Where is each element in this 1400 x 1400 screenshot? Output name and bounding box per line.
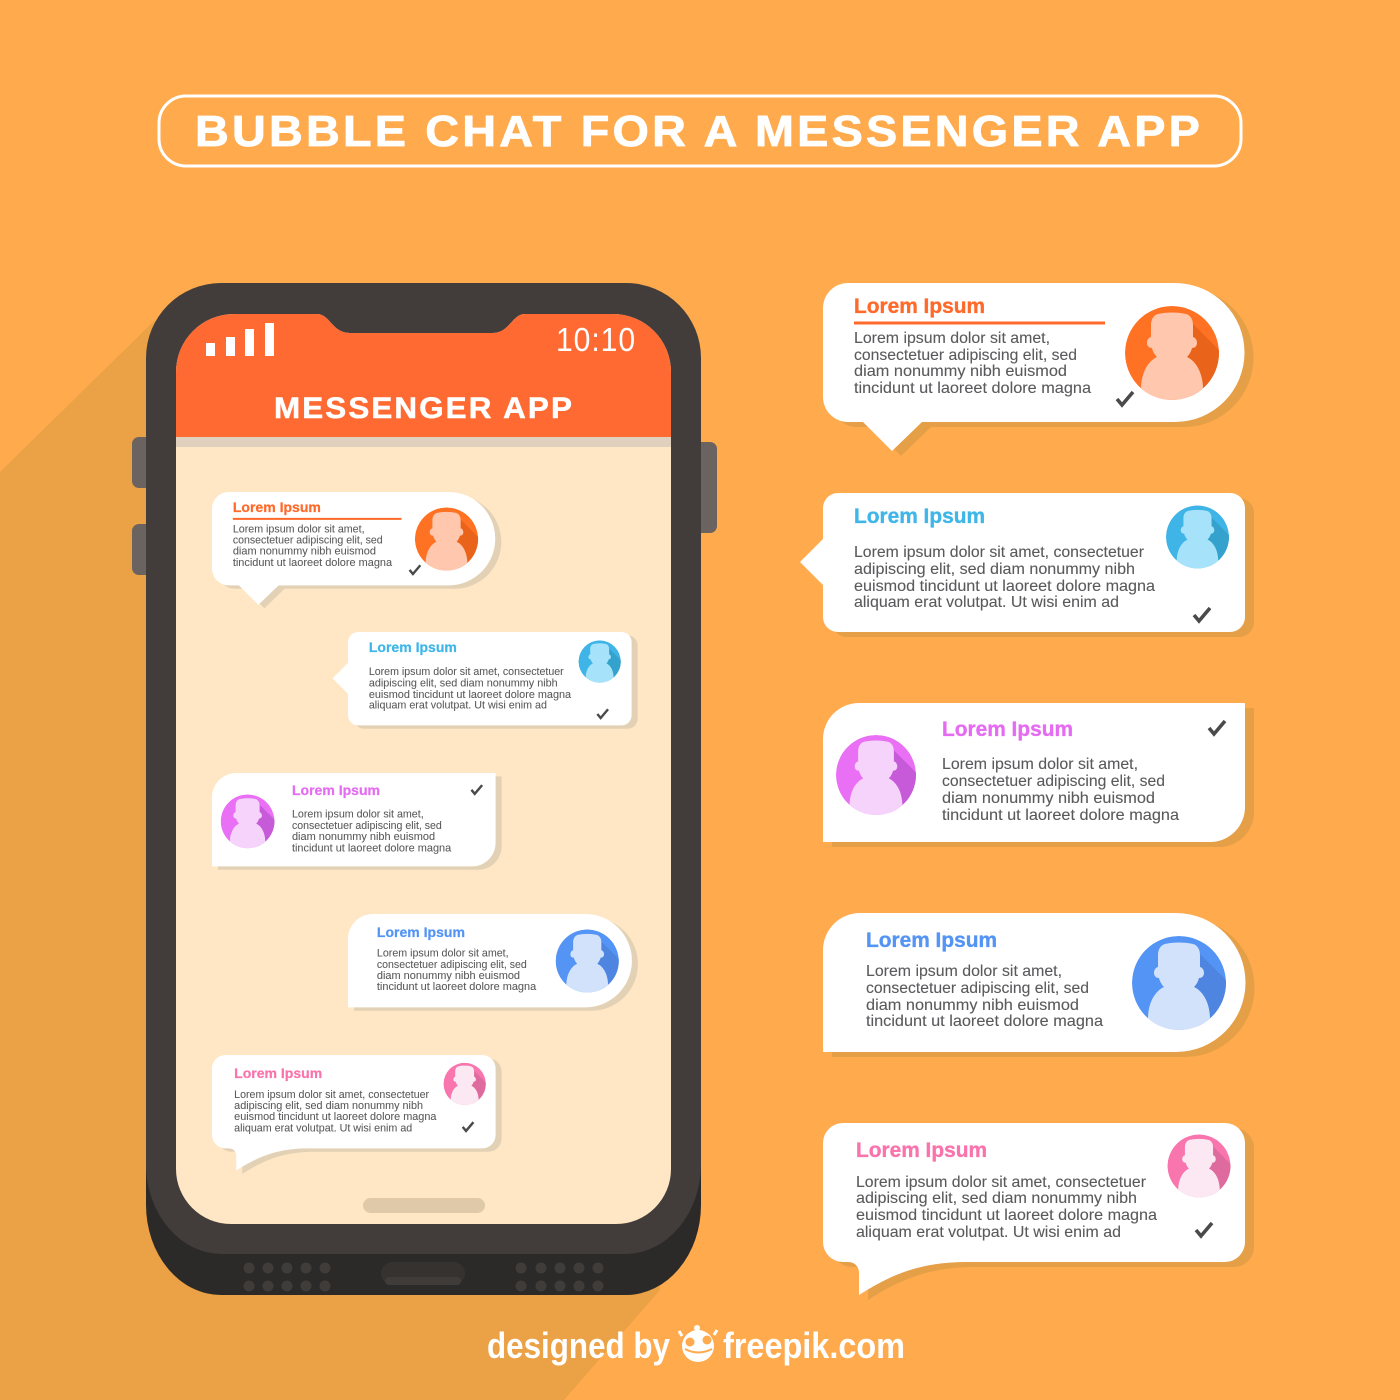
- phone bubble: blue: [348, 914, 638, 1011]
- large bubble: pink: aliquam erat volutpat. Ut wisi enim ad: [856, 1224, 1121, 1241]
- phone bubble: purple: diam nonummy nibh euismod: [292, 831, 435, 843]
- screen: [176, 314, 671, 1224]
- freepik attribution: freepik.com: [723, 1325, 905, 1366]
- large bubble: purple: Lorem Ipsum: [942, 718, 1073, 741]
- large bubble: cyan: Lorem Ipsum: [854, 505, 985, 528]
- large bubble: blue: Lorem ipsum dolor sit amet,: [866, 963, 1062, 980]
- phone bubble: pink: euismod tincidunt ut laoreet dolore magna: [234, 1111, 436, 1123]
- phone front: [146, 283, 701, 1254]
- large bubble: orange: Lorem Ipsum: [854, 295, 985, 318]
- large bubble: pink: Lorem ipsum dolor sit amet, consectetuer: [856, 1174, 1147, 1191]
- large bubble: pink: [823, 1123, 1254, 1300]
- large bubble: purple: diam nonummy nibh euismod: [942, 790, 1155, 807]
- home bar: [363, 1198, 485, 1213]
- large bubble: orange: Lorem ipsum dolor sit amet,: [854, 330, 1050, 347]
- large bubble: purple: tincidunt ut laoreet dolore magna: [942, 807, 1179, 824]
- title: BUBBLE CHAT FOR A MESSENGER APP: [195, 107, 1203, 156]
- phone bubble: pink: adipiscing elit, sed diam nonummy nibh: [234, 1100, 423, 1112]
- clock: 10:10: [556, 321, 636, 358]
- freepik attribution: designed by: [487, 1325, 670, 1366]
- large bubble: blue: consectetuer adipiscing elit, sed: [866, 980, 1089, 997]
- phone bubble: orange: tincidunt ut laoreet dolore magna: [233, 557, 392, 569]
- large bubble: cyan: aliquam erat volutpat. Ut wisi enim ad: [854, 594, 1119, 611]
- large bubble: orange: consectetuer adipiscing elit, sed: [854, 347, 1077, 364]
- phone bubble: blue: Lorem ipsum dolor sit amet,: [377, 947, 509, 959]
- large bubble: blue: Lorem Ipsum: [866, 929, 997, 952]
- signal bars: [206, 323, 274, 356]
- phone base: [146, 800, 701, 1295]
- large bubble: blue: tincidunt ut laoreet dolore magna: [866, 1013, 1103, 1030]
- large bubble: cyan: [800, 493, 1254, 637]
- large bubble: cyan: adipiscing elit, sed diam nonummy nibh: [854, 561, 1135, 578]
- phone bubble: purple: Lorem Ipsum: [292, 782, 380, 798]
- phone bubble: pink: [212, 1055, 502, 1174]
- large bubble: purple: Lorem ipsum dolor sit amet,: [942, 756, 1138, 773]
- speakers and port: [244, 1262, 604, 1292]
- phone bubble: cyan: Lorem Ipsum: [369, 639, 457, 655]
- phone bubble: purple: tincidunt ut laoreet dolore magna: [292, 843, 451, 855]
- app header: [176, 314, 671, 437]
- app title: MESSENGER APP: [274, 392, 574, 425]
- large bubble: pink: adipiscing elit, sed diam nonummy nibh: [856, 1190, 1137, 1207]
- phone bubble: purple: consectetuer adipiscing elit, sed: [292, 820, 442, 832]
- phone: [132, 283, 717, 1295]
- phone bubble: blue: diam nonummy nibh euismod: [377, 970, 520, 982]
- phone bubble: cyan: aliquam erat volutpat. Ut wisi enim ad: [369, 700, 547, 712]
- phone bubble: pink: aliquam erat volutpat. Ut wisi enim ad: [234, 1123, 412, 1135]
- phone bubble: orange: diam nonummy nibh euismod: [233, 545, 376, 557]
- phone bubble: pink: Lorem Ipsum: [234, 1065, 322, 1081]
- side buttons: [132, 437, 717, 575]
- large bubble: orange: diam nonummy nibh euismod: [854, 363, 1067, 380]
- phone bubble: purple: Lorem ipsum dolor sit amet,: [292, 808, 424, 820]
- long phone shadow: [0, 320, 660, 1400]
- large bubble: blue: [823, 913, 1254, 1057]
- phone bubble: cyan: Lorem ipsum dolor sit amet, consectetuer: [369, 666, 564, 678]
- phone bubble: blue: tincidunt ut laoreet dolore magna: [377, 981, 536, 993]
- large bubble: orange: tincidunt ut laoreet dolore magna: [854, 380, 1091, 397]
- phone bubble: orange: Lorem Ipsum: [233, 499, 321, 515]
- large bubble: pink: Lorem Ipsum: [856, 1139, 987, 1162]
- large bubble: blue: diam nonummy nibh euismod: [866, 997, 1079, 1014]
- phone bubble: blue: consectetuer adipiscing elit, sed: [377, 959, 527, 971]
- phone bubble: orange: [212, 492, 501, 608]
- large bubble: purple: consectetuer adipiscing elit, sed: [942, 773, 1165, 790]
- freepik attribution: [487, 1325, 905, 1366]
- phone bubble: cyan: euismod tincidunt ut laoreet dolore magna: [369, 689, 571, 701]
- large bubble: purple: [823, 703, 1254, 847]
- title: [159, 96, 1241, 166]
- phone bubble: pink: Lorem ipsum dolor sit amet, consectetuer: [234, 1089, 429, 1101]
- large bubble: pink: euismod tincidunt ut laoreet dolore magna: [856, 1207, 1157, 1224]
- phone bubble: cyan: adipiscing elit, sed diam nonummy nibh: [369, 677, 558, 689]
- icon: freepik logo: [679, 1325, 717, 1362]
- phone bubble: orange: Lorem ipsum dolor sit amet,: [233, 523, 365, 535]
- phone bubble: purple: [212, 773, 502, 870]
- large bubble: cyan: euismod tincidunt ut laoreet dolore magna: [854, 578, 1155, 595]
- phone bubble: cyan: [333, 632, 638, 729]
- large bubble: cyan: Lorem ipsum dolor sit amet, consectetuer: [854, 544, 1145, 561]
- phone bubble: orange: consectetuer adipiscing elit, sed: [233, 535, 383, 547]
- large bubble: orange: [823, 283, 1254, 456]
- phone bubble: blue: Lorem Ipsum: [377, 924, 465, 940]
